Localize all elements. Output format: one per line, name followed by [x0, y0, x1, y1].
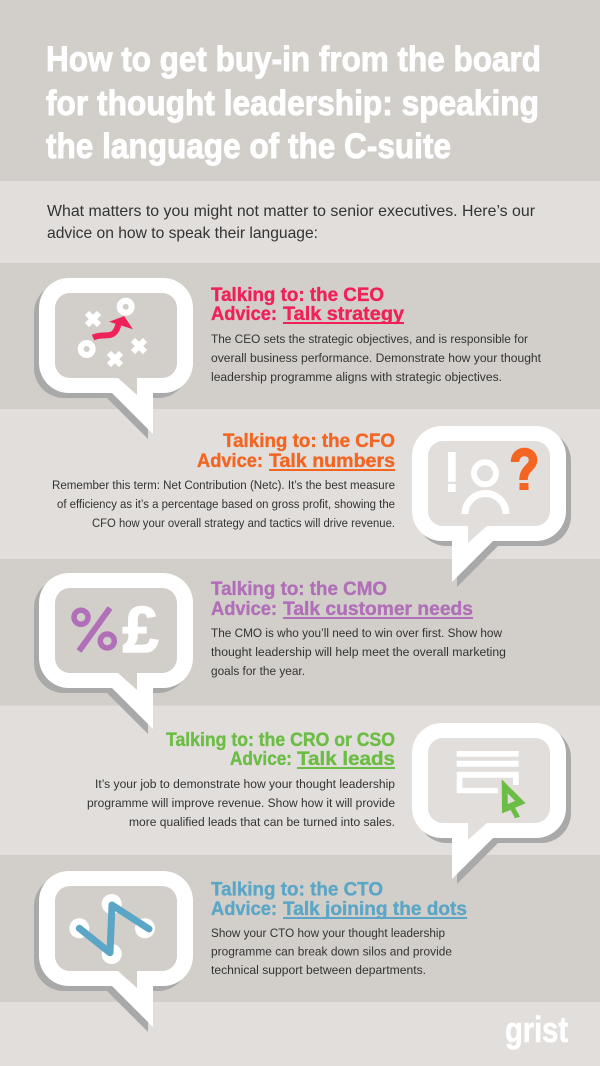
- title: [0, 0, 600, 181]
- speech bubble with person and question icon: [412, 426, 571, 587]
- CRO or CSO body text: [87, 777, 395, 829]
- CEO heading: Advice:: [211, 304, 277, 325]
- speech bubble with joined dots icon: [34, 871, 193, 1032]
- CFO body text: CFO how your overall strategy and tactics will drive revenue.: [92, 516, 395, 530]
- CTO body text: technical support between departments.: [211, 963, 426, 977]
- CFO heading: Talk numbers: [269, 451, 395, 472]
- CMO body text: [211, 626, 506, 678]
- speech bubble with percent and pound icon: [34, 573, 193, 734]
- CTO heading: Talk joining the dots: [283, 899, 467, 920]
- speech bubble with form and cursor icon: [412, 723, 571, 884]
- title: How to get buy-in from the board: [46, 40, 541, 79]
- CMO heading: Talk customer needs: [283, 599, 473, 620]
- panel: CFO: [0, 409, 600, 587]
- intro text: [47, 203, 536, 242]
- speech bubble with strategy icon: [34, 278, 193, 439]
- CTO body text: Show your CTO how your thought leadership: [211, 926, 445, 940]
- CRO or CSO body text: programme will improve revenue. Show how it will provide: [87, 796, 395, 810]
- panel: CTO: [0, 855, 600, 1032]
- intro text: advice on how to speak their language:: [47, 225, 318, 242]
- panel: CMO: [0, 559, 600, 734]
- CMO heading: [211, 579, 473, 620]
- CRO or CSO heading: Advice:: [230, 749, 292, 770]
- CFO body text: of efficiency as it’s a percentage based on gross profit, showing the: [57, 497, 395, 511]
- CEO body text: leadership programme aligns with strategic objectives.: [211, 370, 502, 384]
- CTO heading: Advice:: [211, 899, 277, 920]
- CRO or CSO body text: more qualified leads that can be turned into sales.: [129, 815, 395, 829]
- CEO heading: Talk strategy: [283, 304, 404, 325]
- CRO or CSO body text: It’s your job to demonstrate how your thought leadership: [95, 777, 395, 791]
- CTO heading: [211, 880, 467, 920]
- speech bubble with percent and pound icon: £: [122, 593, 158, 666]
- grist logo: grist: [505, 1009, 568, 1050]
- CMO body text: goals for the year.: [211, 664, 305, 678]
- panel: CRO or CSO: [0, 706, 600, 884]
- CEO heading: [211, 285, 404, 325]
- CFO heading: Advice:: [197, 451, 263, 472]
- CMO heading: Talking to: the CMO: [211, 579, 387, 600]
- CTO body text: programme can break down silos and provide: [211, 944, 452, 958]
- CFO heading: Talking to: the CFO: [223, 431, 395, 452]
- CMO body text: thought leadership will help meet the overall marketing: [211, 645, 506, 659]
- intro text: What matters to you might not matter to senior executives. Here’s our: [47, 203, 536, 220]
- CFO body text: Remember this term: Net Contribution (Netc). It’s the best measure: [52, 478, 395, 492]
- CEO body text: overall business performance. Demonstrate how your thought: [211, 351, 542, 365]
- panel: CEO: [0, 263, 600, 439]
- title: for thought leadership: speaking: [46, 84, 539, 123]
- CEO body text: The CEO sets the strategic objectives, and is responsible for: [211, 332, 528, 346]
- CTO body text: [211, 926, 452, 977]
- CEO body text: [211, 332, 542, 384]
- CRO or CSO heading: Talking to: the CRO or CSO: [166, 730, 395, 751]
- CEO heading: Talking to: the CEO: [211, 285, 384, 306]
- CRO or CSO heading: Talk leads: [297, 749, 395, 770]
- CFO body text: [52, 478, 395, 530]
- CTO heading: Talking to: the CTO: [211, 880, 383, 900]
- title: the language of the C-suite: [46, 127, 451, 166]
- CMO heading: Advice:: [211, 599, 277, 620]
- CFO heading: [197, 431, 395, 472]
- CMO body text: The CMO is who you’ll need to win over first. Show how: [211, 626, 502, 640]
- CRO or CSO heading: [166, 730, 395, 770]
